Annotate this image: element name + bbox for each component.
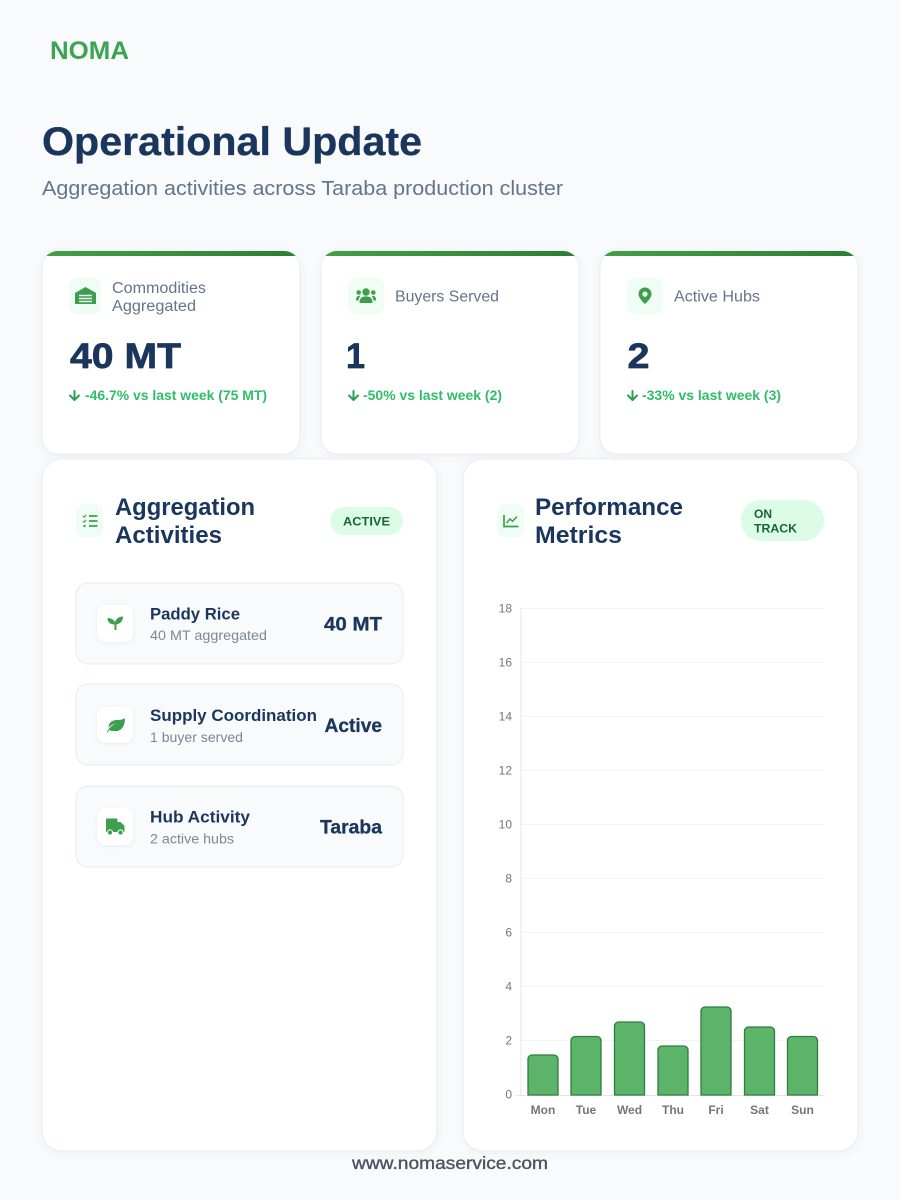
label: commodities aggregated bbox=[112, 280, 206, 315]
y axis labels: 8 bbox=[505, 872, 512, 886]
x axis labels: Sat bbox=[750, 1103, 769, 1117]
y axis labels bbox=[499, 602, 512, 1102]
label: commodities aggregated: Aggregated bbox=[112, 298, 196, 315]
text: supply coordination: 1 buyer served bbox=[150, 729, 243, 745]
delta: commodities: -46.7% vs last week (75 MT) bbox=[85, 388, 267, 403]
delta: hubs: -33% vs last week (3) bbox=[642, 388, 781, 403]
title: Operational Update bbox=[42, 120, 422, 164]
value: 40 MT: 40 MT bbox=[324, 614, 382, 636]
panel: active hubs bbox=[600, 251, 858, 454]
delta: buyers: -50% vs last week (2) bbox=[363, 388, 502, 403]
label: commodities aggregated: Commodities bbox=[112, 280, 206, 297]
footer url: www.nomaservice.com bbox=[351, 1153, 548, 1173]
x axis labels: Mon bbox=[531, 1103, 555, 1117]
heading: aggregation activities: Activities bbox=[115, 522, 222, 549]
value: 2: 2 bbox=[628, 337, 650, 376]
x axis labels: Tue bbox=[576, 1103, 597, 1117]
heading: performance metrics: Metrics bbox=[535, 522, 622, 549]
text: paddy rice: 40 MT aggregated bbox=[150, 627, 267, 643]
y axis labels: 16 bbox=[499, 656, 512, 670]
value: active: Active bbox=[324, 716, 382, 737]
panel: buyers served bbox=[321, 251, 579, 454]
y axis labels: 6 bbox=[505, 926, 512, 940]
panel: performance metrics bbox=[463, 459, 858, 1151]
y axis labels: 18 bbox=[499, 602, 512, 616]
label: buyers served: Buyers Served bbox=[395, 288, 499, 306]
x axis labels: Thu bbox=[662, 1103, 684, 1117]
badge: active: ACTIVE bbox=[343, 514, 390, 528]
value: 40 MT: 40 MT bbox=[70, 337, 181, 376]
value: taraba: Taraba bbox=[320, 818, 382, 838]
badge: on track: TRACK bbox=[754, 522, 797, 536]
text: supply coordination bbox=[150, 707, 317, 745]
y axis labels: 14 bbox=[499, 710, 512, 724]
heading: performance metrics bbox=[535, 494, 683, 549]
text: supply coordination: Supply Coordination bbox=[150, 707, 317, 725]
y axis labels: 4 bbox=[505, 980, 512, 994]
text: paddy rice: Paddy Rice bbox=[150, 606, 240, 624]
badge: on track: ON bbox=[754, 507, 772, 521]
value: 1: 1 bbox=[346, 337, 365, 376]
y axis labels: 12 bbox=[499, 764, 512, 778]
x axis labels bbox=[531, 1103, 814, 1117]
panel: commodities aggregated bbox=[42, 251, 300, 454]
panel: aggregation activities bbox=[42, 459, 437, 1151]
row: hub activity bbox=[76, 786, 403, 867]
icon: list check bbox=[83, 515, 98, 527]
y axis labels: 0 bbox=[505, 1088, 512, 1102]
row: paddy rice bbox=[76, 583, 403, 664]
text: hub activity: 2 active hubs bbox=[150, 830, 234, 846]
icon: warehouse bbox=[75, 287, 96, 304]
y axis labels: 10 bbox=[499, 818, 512, 832]
icon: users bbox=[356, 288, 376, 303]
heading: performance metrics: Performance bbox=[535, 494, 683, 521]
y axis labels: 2 bbox=[505, 1034, 512, 1048]
icon: chart line bbox=[504, 515, 518, 526]
row: supply coordination bbox=[76, 684, 403, 765]
icon: seedling bbox=[108, 616, 123, 630]
text: hub activity bbox=[150, 808, 251, 846]
bar chart bbox=[499, 602, 824, 1117]
x axis labels: Wed bbox=[617, 1103, 642, 1117]
bars bbox=[528, 1007, 818, 1095]
x axis labels: Fri bbox=[708, 1103, 724, 1117]
text: paddy rice bbox=[150, 606, 267, 643]
badge: on track bbox=[741, 500, 824, 541]
icon: map pin bbox=[638, 288, 652, 304]
heading: aggregation activities: Aggregation bbox=[115, 494, 255, 521]
icon: truck bbox=[106, 818, 124, 835]
badge: active bbox=[330, 507, 403, 535]
x axis labels: Sun bbox=[791, 1103, 814, 1117]
label: active hubs: Active Hubs bbox=[674, 288, 760, 306]
logo: NOMA: NOMA bbox=[50, 37, 129, 65]
heading: aggregation activities bbox=[115, 494, 255, 549]
icon: leaf bbox=[107, 718, 125, 733]
subtitle: Aggregation activities across Taraba production cluster bbox=[42, 178, 563, 200]
text: hub activity: Hub Activity bbox=[150, 808, 251, 826]
